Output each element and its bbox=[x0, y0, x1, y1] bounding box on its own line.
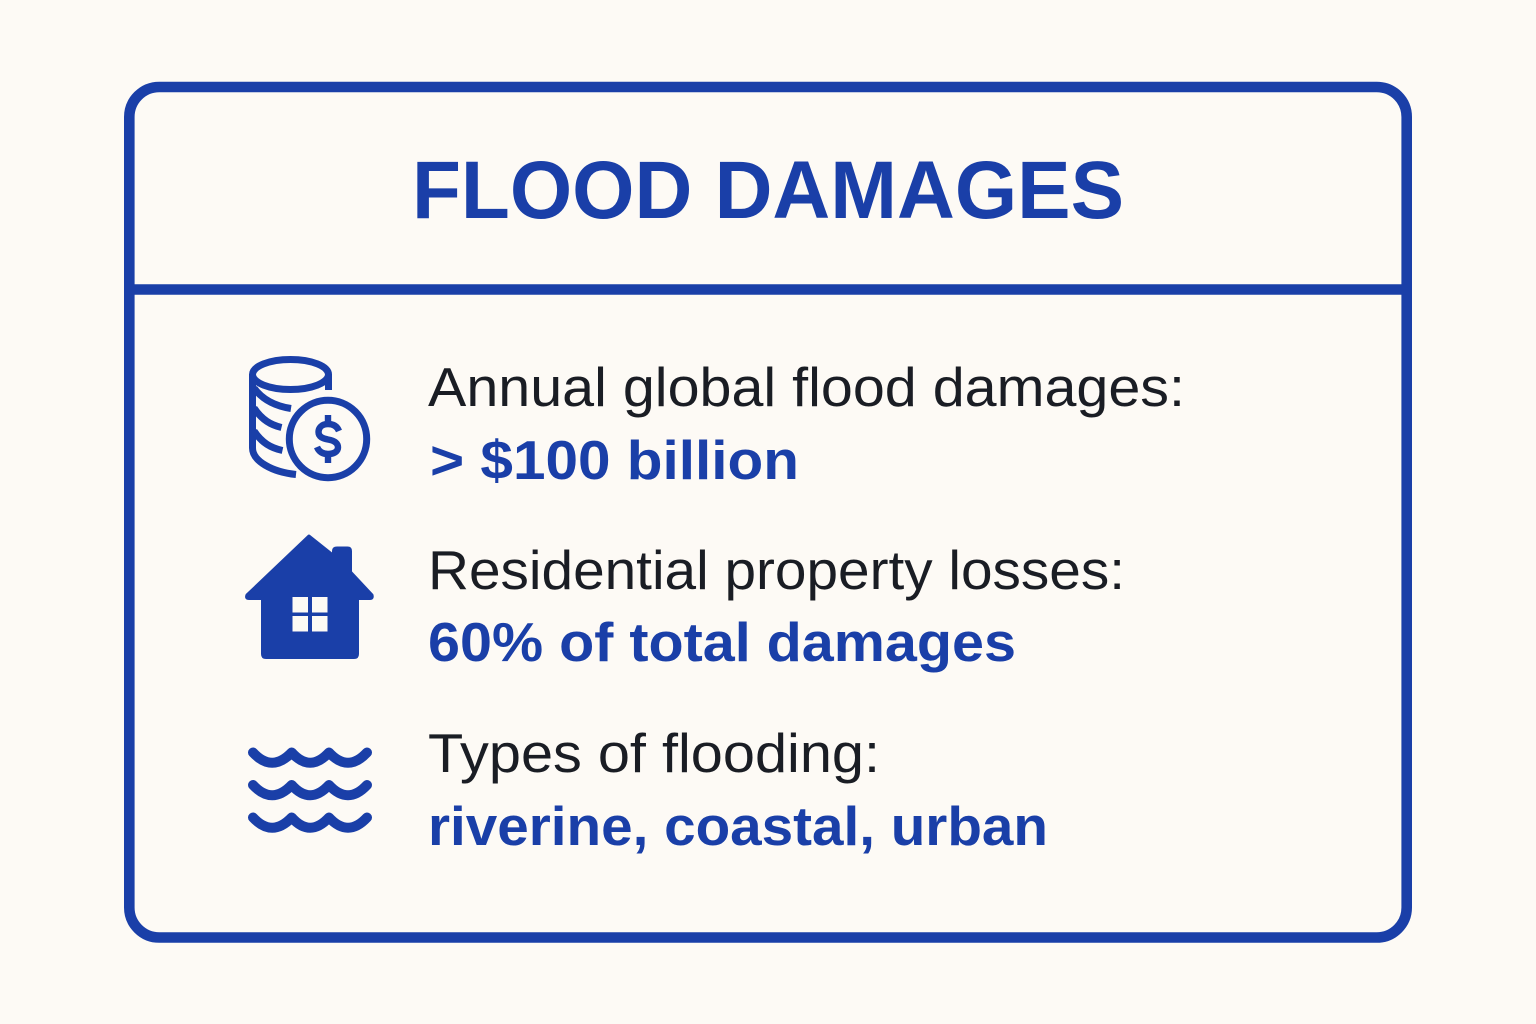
text: annual global flood damages bbox=[428, 356, 1185, 491]
text: types of flooding: Types of flooding: bbox=[428, 722, 880, 784]
text: annual global flood damages: Annual global flood damages: bbox=[428, 356, 1185, 418]
text: residential property losses: 60% of total damages bbox=[428, 611, 1016, 673]
icon: house window bbox=[292, 597, 328, 632]
text: types of flooding bbox=[428, 722, 1048, 857]
panel: flood damages card bbox=[129, 87, 1407, 938]
icon: coin stack with dollar bbox=[252, 360, 367, 478]
icon: house bbox=[247, 536, 372, 658]
text: residential property losses bbox=[428, 539, 1125, 673]
title: FLOOD DAMAGES bbox=[412, 145, 1124, 236]
text: annual global flood damages: > $100 billion bbox=[430, 429, 799, 491]
icon: waves bbox=[253, 752, 367, 828]
text: types of flooding: riverine, coastal, urban bbox=[428, 795, 1048, 857]
text: residential property losses: Residential property losses: bbox=[428, 539, 1125, 601]
icon: dollar sign bbox=[317, 415, 339, 463]
